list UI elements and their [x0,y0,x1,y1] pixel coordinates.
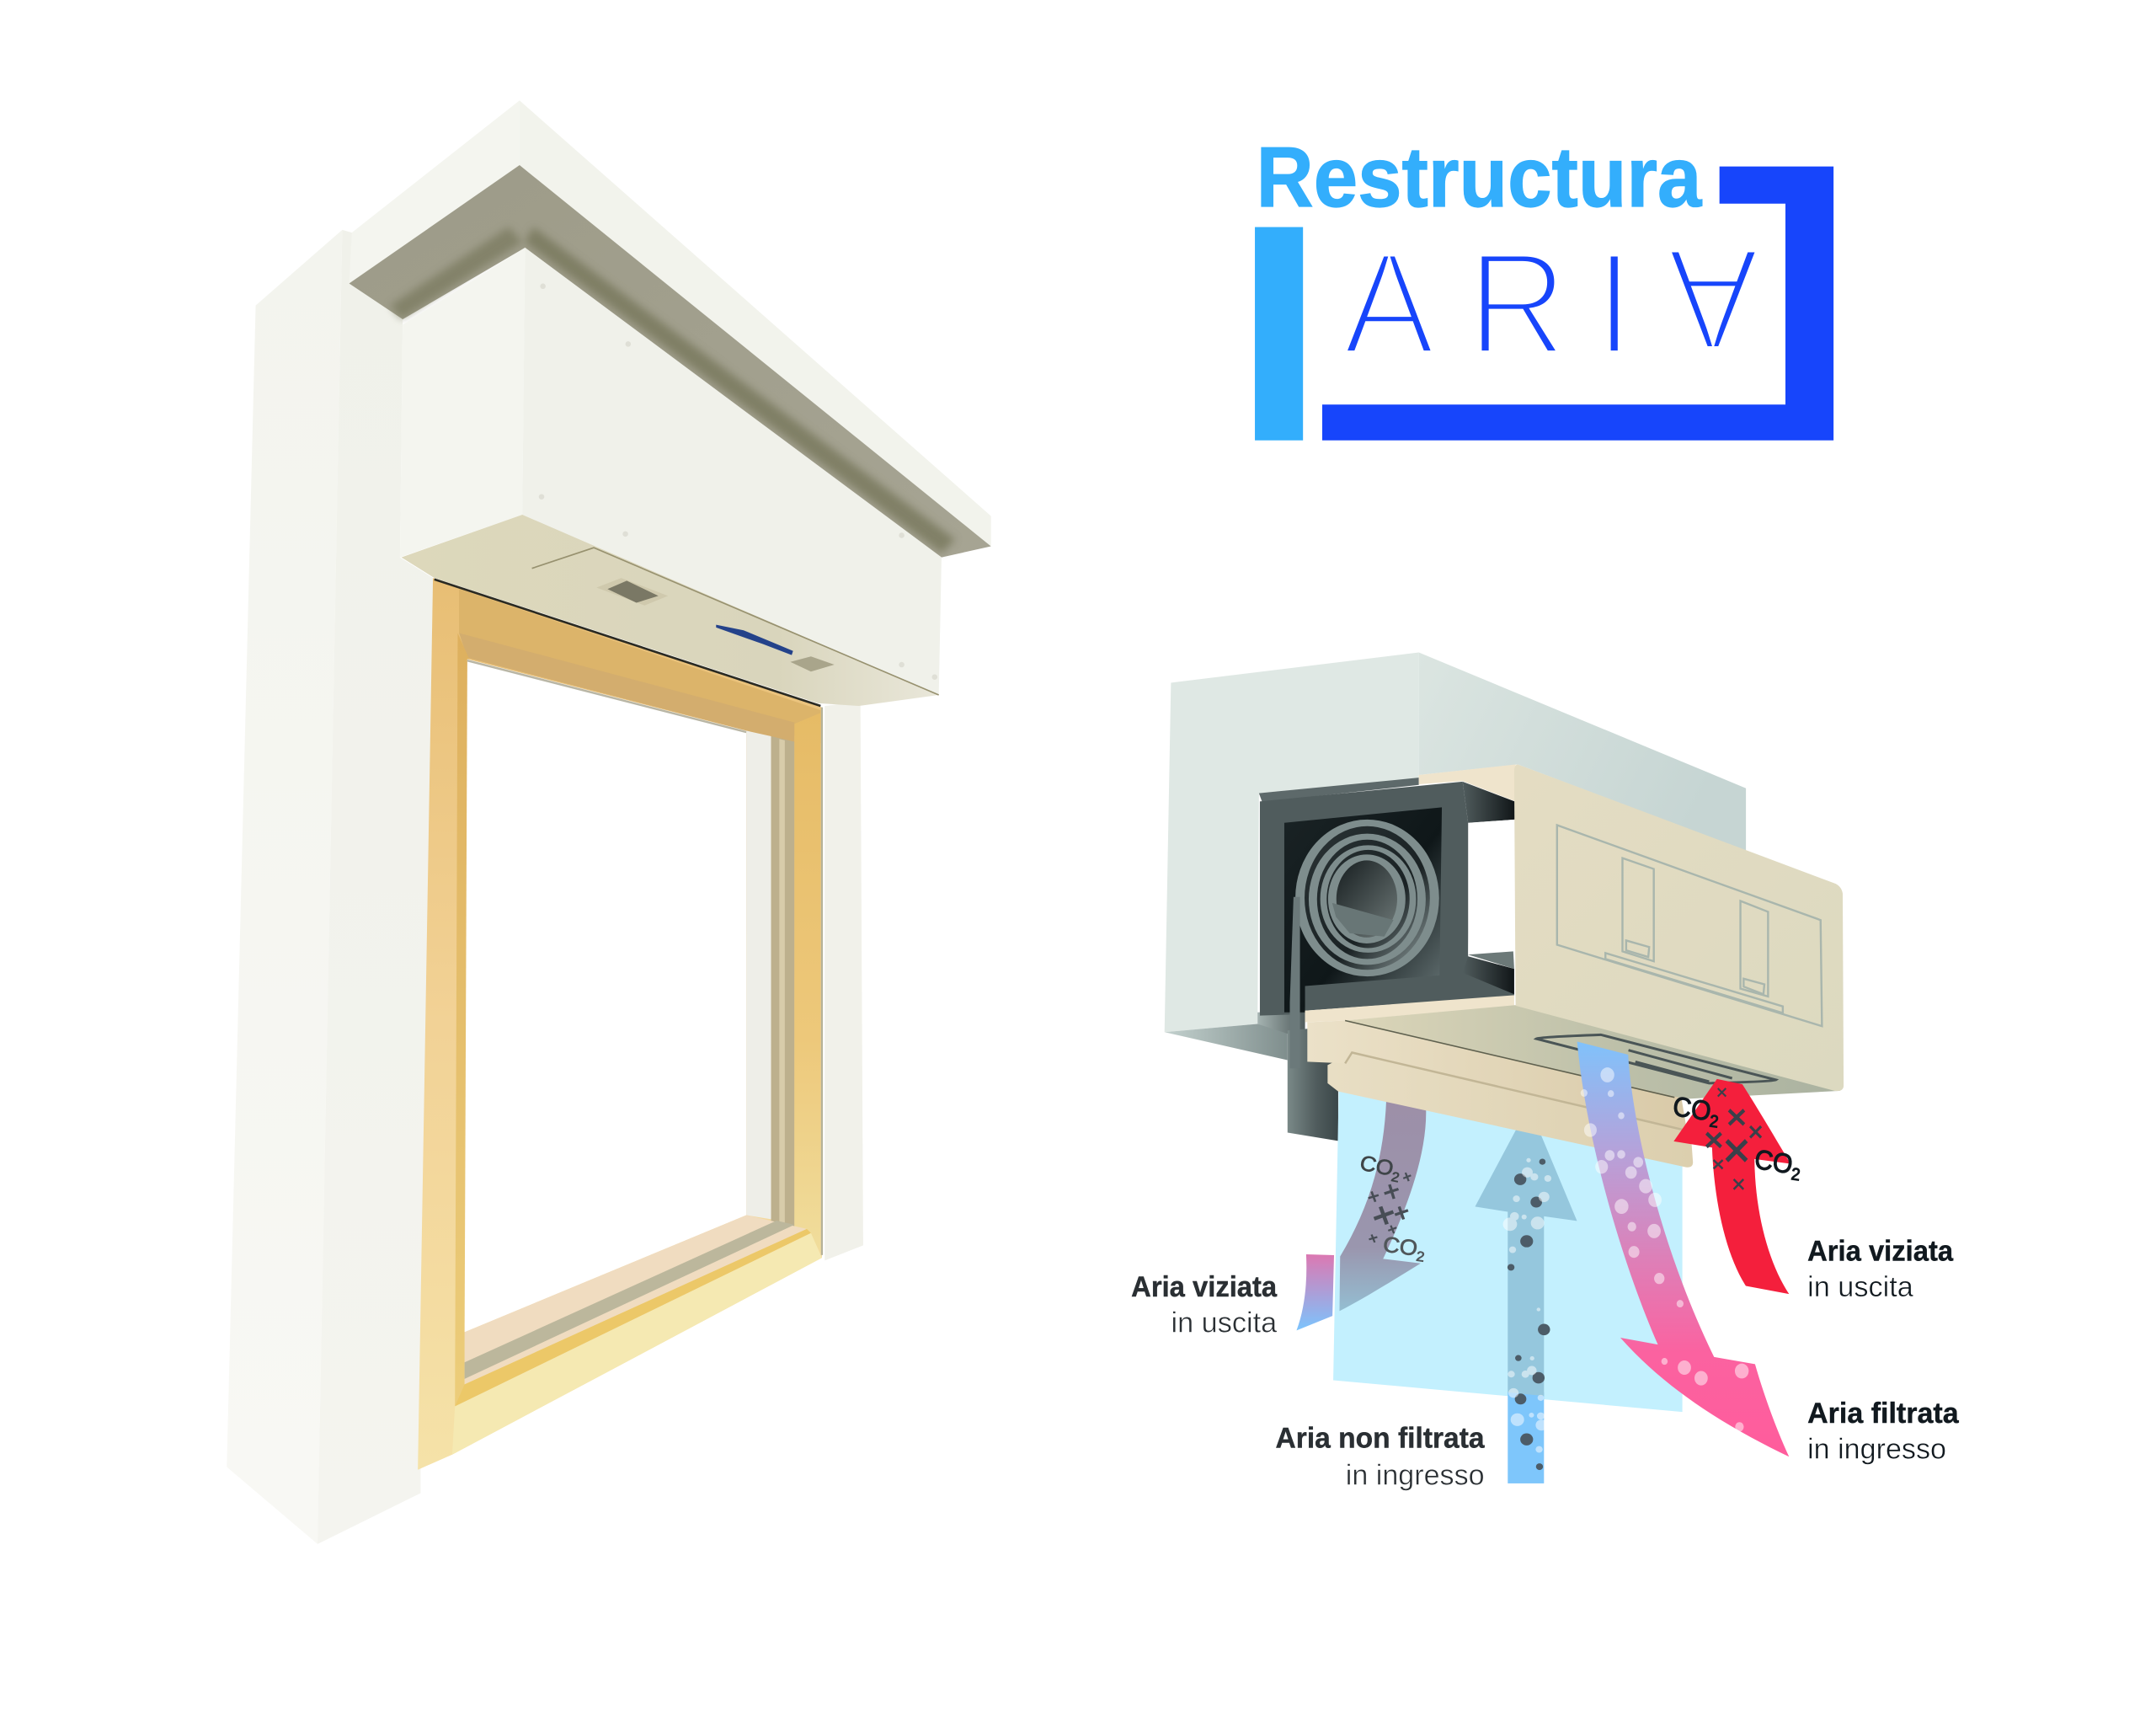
vent grille right [790,656,835,671]
white opening [1468,820,1514,954]
label: Aria viziata in uscita, left: in uscita [1171,1307,1278,1339]
right shadow line [821,708,823,1255]
right reveal [746,730,771,1219]
rail step shadow [1345,1052,1689,1131]
sill glass band [465,1221,794,1379]
coil inner wedge [1332,903,1394,937]
coil backing [1300,823,1434,973]
glazing strips [771,736,794,1229]
coil cavity [1284,807,1442,1013]
cornice right face [520,100,991,547]
photo: window with roller shutter box [227,100,991,1544]
CO2 label lower: CO [1381,1232,1419,1261]
rail to panel seam [1345,1021,1674,1098]
technical line drawing [1557,826,1822,1026]
coil second ring [1313,836,1422,962]
shutter box front face [522,248,942,695]
housing front panel [1514,765,1844,1091]
coil hollow [1332,858,1401,940]
wood frame [418,578,822,1470]
bottom rail [452,1233,822,1455]
upper rail [1307,1021,1687,1131]
unfiltered air arrow outside [1508,1392,1544,1483]
label: Aria filtrata in ingresso: in ingresso [1807,1434,1946,1466]
label: Aria filtrata in ingresso [1807,1398,1960,1466]
opening floor [1468,951,1514,969]
lower rail [1327,1052,1693,1168]
vent grille left [596,578,668,606]
logo word ARIA: ARIA [1342,218,1759,385]
dark pollutant particles [1508,1158,1550,1470]
rivets [539,284,937,680]
underside crease [532,548,939,695]
right frame strip [794,713,820,1253]
coil third ring [1323,847,1413,950]
masonry wall left face [1165,652,1419,1032]
CO2 marks on red arrow [1706,1088,1761,1189]
label: Aria non filtrata in ingresso: in ingresso [1346,1460,1485,1492]
shutter box left face [400,248,525,558]
arrows right section [1577,1041,1803,1456]
frame base [418,578,822,1470]
shutter box underside [402,515,939,706]
recess shadow [1259,778,1419,802]
sill [465,1215,807,1384]
glass pane [1333,1091,1683,1412]
opening top glass line [467,660,746,732]
glazing highlight [779,739,785,1225]
housing bottom panel [1345,1005,1840,1099]
label: Aria viziata in uscita, right: in uscita [1807,1271,1914,1303]
top rail [459,589,820,743]
filtered air arrow [1577,1041,1789,1456]
arrows and labels left section [1296,1100,1577,1483]
sill bevel [455,1229,811,1407]
pale particles [1503,1158,1551,1453]
right wall strip [825,702,863,1260]
clean air bubbles [1581,1067,1748,1431]
coil outer ring [1300,823,1434,973]
CO2 label red arrow right: 2 [1790,1165,1801,1185]
inner left strip [455,633,469,1407]
label: Aria viziata in uscita, left [1131,1271,1278,1339]
masonry wall underside [1165,1024,1288,1060]
shutter tail [1290,897,1300,1068]
top bevel [459,633,794,743]
intake slot outline [1536,1034,1776,1083]
shutter coil [1300,823,1434,973]
label: Aria viziata in uscita, left: Aria viziata [1131,1271,1278,1303]
label: Aria filtrata in ingresso: Aria filtrata [1807,1398,1960,1430]
cornice shadow [525,227,955,553]
label: Aria non filtrata in ingresso: Aria non filtrata [1276,1423,1486,1455]
CO2 label red arrow left: 2 [1709,1112,1720,1132]
logo light-blue bar [1255,227,1303,441]
outer part of stale air arrow [1296,1254,1334,1330]
CO2 label upper: CO [1358,1152,1396,1181]
label: Aria viziata in uscita, right [1807,1235,1954,1303]
cream top cap [1419,765,1516,801]
cornice shadow left [390,227,522,319]
CO2 label red arrow right: CO [1753,1144,1795,1180]
cornice left face [350,100,520,284]
wall pier front face [318,230,433,1544]
unfiltered air arrow inside [1475,1128,1577,1396]
dark insulation frame [1260,782,1514,1016]
stale air arrow inside room [1339,1100,1426,1311]
side channel bottom [1463,956,1514,994]
diagram: ventilated shutter box cross-section [1165,652,1844,1483]
recess shadow below frame [1257,1011,1305,1034]
label: Aria non filtrata in ingresso [1276,1423,1486,1492]
housing section [1165,652,1844,1141]
masonry wall right face [1419,652,1746,851]
CO2 marks on stale air arrow [1369,1173,1411,1243]
rails over pane [1307,1021,1693,1168]
logo: Restructura ARIA [1255,130,1833,441]
shutter blade below [1288,1025,1345,1141]
wall pier left face [227,230,342,1544]
window opening [465,660,746,1332]
coil inner ring [1332,858,1401,940]
cream bottom sill [1305,995,1514,1022]
logo blue bracket [1322,167,1833,441]
label: Aria viziata in uscita, right: Aria viziata [1807,1235,1954,1267]
blue slot [716,625,793,655]
CO2 label upper: 2 [1390,1169,1401,1185]
CO2 label lower: 2 [1415,1248,1426,1265]
cornice underside [350,165,991,558]
stale air exhaust arrow [1673,1079,1790,1294]
logo word Restructura: Restructura [1257,130,1702,225]
side channel top [1463,782,1514,823]
CO2 label red arrow left: CO [1671,1091,1713,1127]
top shadow line [435,580,820,706]
